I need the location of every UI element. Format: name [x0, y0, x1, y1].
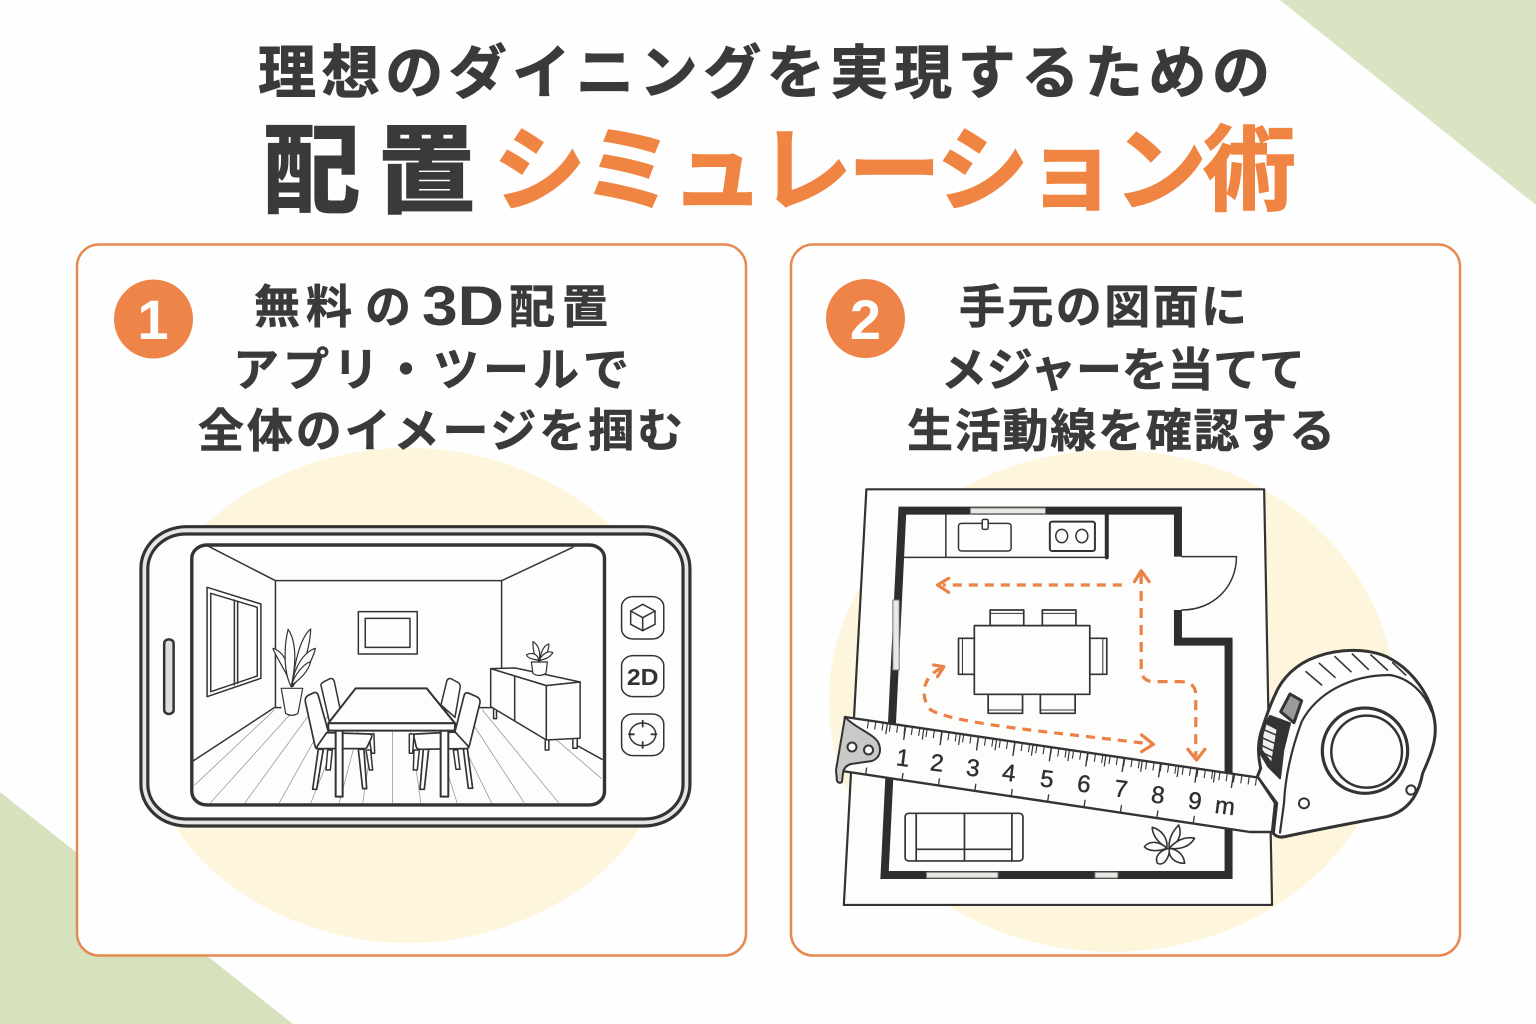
panel 1 cream background circle	[176, 448, 640, 943]
panel 1 heading: アプリ・ツールで	[233, 334, 629, 400]
panel 1: 3D app	[77, 244, 746, 956]
potted plant	[273, 629, 315, 715]
title	[258, 26, 1296, 233]
panel 2 heading: メジャーを当てて	[941, 334, 1305, 400]
top-view plant	[1144, 825, 1195, 864]
back chairs	[321, 679, 460, 770]
thick walls	[885, 511, 1229, 875]
dining set	[305, 679, 480, 797]
route arrow to the left	[938, 578, 1122, 592]
rotate button	[622, 714, 664, 756]
number badge 1: 1	[137, 288, 169, 351]
tape housing	[1257, 650, 1435, 837]
tape numbers: 9	[1187, 787, 1203, 816]
panel 1 heading: 3D	[422, 274, 504, 337]
3D cube button	[622, 597, 664, 639]
sofa	[905, 813, 1023, 861]
panel 1 heading	[198, 271, 683, 461]
tape numbers: 5	[1039, 765, 1055, 794]
kitchen counter	[903, 513, 1107, 557]
tape numbers: 7	[1113, 775, 1129, 804]
room walls	[194, 547, 602, 761]
tape numbers: m	[1213, 792, 1236, 821]
panel 1 heading: 全体のイメージを掴む	[198, 395, 683, 461]
floor planks	[195, 710, 601, 803]
number badge 1	[114, 280, 193, 358]
tape end hook	[836, 717, 880, 783]
smartphone illustration	[141, 527, 690, 826]
window	[207, 587, 261, 697]
door	[1182, 557, 1236, 610]
decorative green corner: top right	[1280, 0, 1536, 205]
tape numbers	[895, 744, 1236, 821]
tape blade	[842, 717, 1275, 832]
tape numbers: 4	[1001, 759, 1017, 788]
panel 2 frame	[791, 244, 1460, 956]
title line 1: 理想のダイニングを実現するための	[258, 26, 1270, 110]
tape numbers: 1	[895, 744, 911, 773]
panel 2 cream background circle	[829, 450, 1395, 952]
tape numbers: 6	[1076, 770, 1092, 799]
sideboard	[491, 668, 580, 750]
front chairs	[305, 692, 480, 789]
title line 2: dark part: 配置	[263, 92, 475, 233]
dining table and chairs	[959, 610, 1107, 713]
2D button: 2D	[627, 666, 658, 691]
title line 2: orange part: シミュレーション術	[493, 95, 1296, 230]
tape numbers: 3	[965, 754, 981, 783]
tape numbers: 2	[929, 749, 945, 778]
number badge 2: 2	[850, 288, 881, 351]
wall picture	[358, 612, 417, 654]
number badge 2	[826, 279, 905, 358]
curved route arrow	[924, 665, 1153, 752]
panel 2 heading	[907, 271, 1335, 461]
panel 2 heading: 生活動線を確認する	[907, 395, 1335, 461]
2D button	[622, 656, 664, 697]
phone body	[141, 527, 690, 826]
panel 1 heading: 配置	[509, 271, 608, 337]
small plant on sideboard	[526, 642, 553, 675]
panel 2 heading: 手元の図面に	[959, 271, 1247, 337]
side buttons	[622, 597, 664, 756]
room scene on the screen	[192, 545, 604, 805]
tape measure	[836, 650, 1435, 837]
tape numbers: 8	[1150, 781, 1166, 810]
dining table	[328, 688, 455, 797]
dashed route arrows	[924, 571, 1205, 760]
panel 1 heading: 無料の	[254, 271, 411, 337]
panel 1 frame	[77, 244, 746, 956]
floor plan illustration	[844, 489, 1272, 905]
paper sheet	[844, 489, 1272, 905]
windows	[893, 508, 1118, 878]
route arrow up and down	[1134, 571, 1205, 760]
tape tick marks	[866, 724, 1257, 824]
panel 2: floor plan and tape	[791, 244, 1460, 956]
decorative green corner: bottom left	[0, 792, 293, 1024]
